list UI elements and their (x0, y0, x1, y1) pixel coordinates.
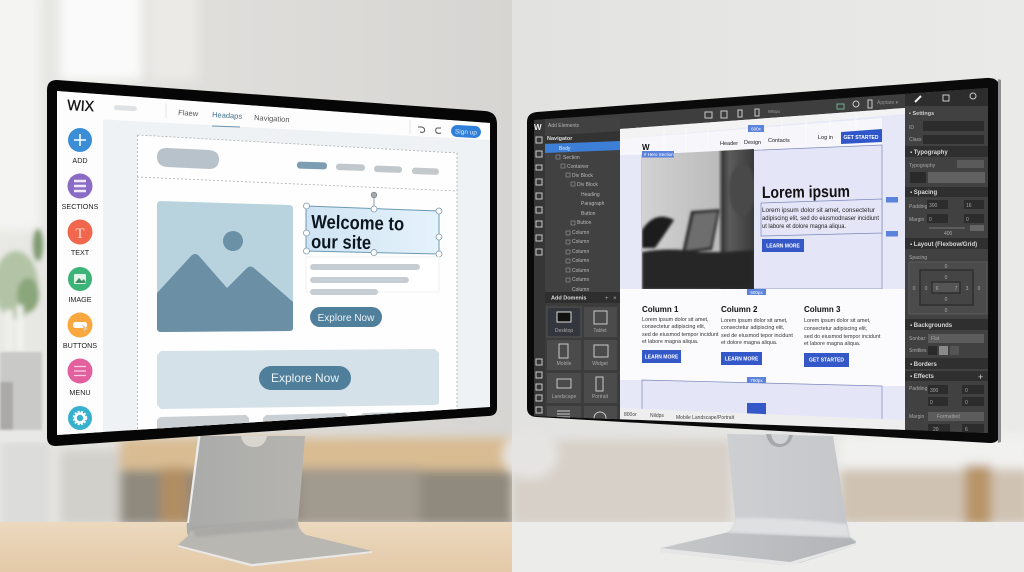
hero frame (642, 145, 882, 289)
image placeholder (157, 201, 293, 332)
column 3: Lorem ipsum dolor sit amet, (804, 318, 871, 324)
navigator panel (545, 118, 620, 293)
top toolbar (57, 91, 490, 140)
tool: text: T (75, 226, 85, 242)
left monitor stand (178, 436, 372, 566)
spacing: 0 (929, 217, 932, 223)
tree rows: Column (572, 268, 589, 274)
plant (0, 229, 43, 352)
sidebar (57, 116, 103, 441)
banner: Explore Now (271, 371, 339, 385)
lower section (642, 377, 882, 420)
table tops (0, 522, 1024, 572)
layout (905, 238, 988, 314)
button: explore now small: Explore Now (318, 313, 375, 324)
page canvas (137, 135, 457, 440)
status bar tabs: Nildps (650, 413, 664, 419)
screen: website editor (50, 85, 495, 441)
left icon rail: W (534, 123, 542, 132)
paragraph placeholder (306, 257, 439, 295)
grid columns (664, 118, 856, 136)
top toolbar: Apptate ▾ (877, 100, 899, 106)
tool: menu: MENU (69, 388, 91, 397)
logo: WIX (67, 97, 95, 115)
icon: undo (418, 127, 425, 132)
column 2: sed de eiusmod tepor incidunt (721, 333, 793, 339)
box model: 7 (955, 286, 958, 292)
backgrounds: Sonbar: (909, 336, 927, 342)
tree rows: Column (572, 258, 589, 264)
column 2: et dolore magna aliqua. (721, 340, 777, 346)
column 2: Lorem ipsum dolor sit amet, (721, 318, 788, 324)
tree rows: Paragraph (581, 201, 605, 207)
panel tabs (915, 93, 976, 102)
columns section (620, 289, 905, 386)
borders (905, 358, 988, 369)
hero button (762, 239, 804, 252)
selected heading: Welcome to (311, 212, 404, 235)
tree rows: Section (563, 155, 580, 161)
tree rows: Container (567, 164, 589, 170)
selected heading: our site (311, 232, 371, 254)
column 3: et labore magna aliqua. (804, 341, 860, 347)
column 3: GET STARTED (809, 358, 844, 364)
hero paragraph (761, 199, 882, 236)
navigator panel: Navigator (547, 136, 573, 142)
column 1: LEARN MORE (645, 354, 679, 360)
settings: ▪ Settings (909, 111, 934, 117)
tab: Flaew (178, 108, 199, 118)
nav placeholders (297, 161, 439, 175)
selected body row (545, 141, 620, 153)
effects: 0 (965, 388, 968, 394)
top toolbar (705, 100, 899, 118)
background room: left half (0, 0, 520, 572)
right monitor (527, 78, 1001, 445)
spacing badges (886, 197, 898, 236)
tool: add (68, 128, 92, 165)
selected heading (304, 192, 442, 257)
box model: 0 (945, 275, 948, 281)
tool: buttons (63, 312, 97, 350)
tile: desktop: Desktop (555, 328, 573, 334)
spacing: 0 (966, 217, 969, 223)
banner (157, 349, 439, 409)
backgrounds: Smitlies (909, 348, 927, 354)
box model: 0 (945, 297, 948, 303)
tile: landscape: Landscape (552, 394, 576, 400)
typography: Typography (909, 163, 936, 169)
add elements panel (545, 292, 620, 424)
box model: 0 (913, 286, 916, 292)
tool: buttons: BUTTONS (63, 341, 97, 350)
column 1: Lorem ipsum dolor sit amet, (642, 317, 709, 323)
box model (909, 262, 987, 314)
icon: redo (436, 128, 441, 133)
width badge (748, 125, 764, 132)
tool: menu (68, 358, 92, 397)
tool: add: ADD (72, 156, 88, 165)
tree rows: Column (572, 239, 589, 245)
effects: 6 (965, 427, 968, 433)
plant pot (0, 352, 48, 442)
hero section badge: # Hero Section (644, 152, 674, 157)
button: explore now small (310, 307, 382, 327)
column 3 (804, 305, 881, 367)
spacing: 16 (966, 203, 972, 209)
box model: 0 (945, 264, 948, 270)
typography (905, 146, 988, 183)
effects: 300 (930, 388, 939, 394)
navigator panel: Add Elements (548, 123, 580, 129)
tab: Navigation (254, 113, 290, 124)
spacing: 300 (929, 203, 938, 209)
layout: Spacing (909, 255, 927, 261)
spacing (905, 187, 988, 237)
add elements panel: Add Domenis (551, 296, 586, 302)
add elements panel: × (613, 296, 617, 302)
borders: ▪ Borders (910, 362, 937, 368)
header nav: Contacts (768, 138, 790, 144)
monitor bezel right (527, 78, 1000, 443)
logo placeholder (157, 148, 219, 169)
column 3: Column 3 (804, 305, 841, 314)
layout: ▪ Layout (Flexbow/Grid) (910, 242, 977, 248)
backgrounds (905, 319, 988, 355)
status bar tabs: 800or (624, 412, 637, 418)
header nav: W (642, 143, 650, 152)
tool: image: IMAGE (68, 295, 92, 304)
column 3: sed do eiusmod tempor incidunt (804, 334, 881, 340)
column 1: et labore magna aliqua. (642, 339, 698, 345)
monitor bezel left (47, 80, 497, 446)
width badge: 600x (751, 126, 762, 132)
tree rows: Heading (581, 192, 600, 198)
top toolbar: 980px (768, 109, 781, 114)
tree rows: Column (572, 277, 589, 283)
tree rows: Column (572, 230, 589, 236)
effects: Margin (909, 414, 925, 420)
background room: right half (502, 0, 1024, 572)
hero paragraph: adipiscing elit, sed do eiusmodnaser incidiunt (762, 215, 879, 222)
typography: ▪ Typography (910, 150, 948, 156)
screen: dark editor (530, 85, 995, 445)
effects: Padding (909, 386, 928, 392)
box model: 6 (936, 286, 939, 292)
hero button: LEARN MORE (766, 244, 800, 250)
columns section: 600px (750, 290, 763, 295)
tree rows: Div Block (577, 182, 598, 188)
column 2: consectetur adipiscing elit, (721, 325, 785, 331)
column 2 (721, 305, 793, 365)
tree rows: Button (577, 220, 592, 226)
spacing: ▪ Spacing (910, 190, 937, 196)
tool: image (68, 267, 92, 304)
left icon rail (534, 118, 545, 418)
effects: 20 (933, 427, 939, 433)
effects (905, 371, 988, 433)
tree rows: Button (581, 211, 596, 217)
header nav: Design (744, 140, 761, 146)
column 2: Column 2 (721, 305, 758, 314)
navigator panel: Body (559, 146, 571, 152)
hero paragraph: Lorem ipsum dolor sit amet, consectetur (762, 207, 876, 214)
settings: ID (909, 125, 914, 131)
column 3: consectetur adipiscing elit, (804, 326, 868, 332)
column 2: LEARN MORE (725, 356, 759, 362)
box model: 3 (966, 286, 969, 292)
sign up button: Sign up (455, 128, 477, 137)
header nav (642, 129, 882, 152)
card placeholders (157, 411, 427, 429)
backgrounds: Flat (931, 336, 940, 342)
effects: 0 (965, 400, 968, 406)
spacing: 400 (944, 231, 953, 237)
hero paragraph: ut labore et dolore magna aliqua. (762, 223, 846, 230)
tree rows: Column (572, 249, 589, 255)
toolbar icons (837, 100, 872, 109)
settings (909, 111, 984, 144)
tile: widget: Widget (592, 361, 608, 367)
tree rows: Div Block (572, 173, 593, 179)
effects: 0 (930, 400, 933, 406)
backgrounds: ▪ Backgrounds (910, 323, 953, 329)
tree rows: Column (572, 287, 589, 293)
box model: 0 (978, 286, 981, 292)
sign up button (451, 125, 481, 138)
right monitor stand (660, 434, 856, 565)
column 1: sed de eiusmod tempor incidunt (642, 332, 719, 338)
header nav: Header (720, 141, 738, 147)
box model: 0 (925, 286, 928, 292)
column 1: Column 1 (642, 305, 679, 314)
spacing: Margin (909, 217, 925, 223)
tree rows (563, 155, 605, 293)
tile: mobile: Mobile (557, 361, 572, 367)
tool: settings (68, 406, 92, 430)
effects: ▪ Effects (910, 374, 934, 380)
tile: portrait: Portrait (592, 394, 609, 400)
canvas (620, 108, 905, 432)
tool: text (68, 220, 92, 257)
column 1: consectetur adipiscing elit, (642, 324, 706, 330)
box model: 0 (945, 308, 948, 314)
hero heading: Lorem ipsum (762, 183, 850, 202)
tool: sections (62, 174, 99, 211)
header nav: GET STARTED (844, 135, 879, 141)
lower section: 760px (750, 378, 763, 383)
tool: text: TEXT (71, 248, 90, 257)
tile: tablet: Tablet (593, 328, 607, 334)
status bar tabs (620, 408, 905, 432)
right properties panel (905, 85, 990, 435)
hero photo (642, 148, 755, 290)
status bar tabs: Mobile Landscape/Portrait (676, 415, 735, 421)
viewport icons (705, 109, 759, 118)
settings: Class (909, 137, 922, 143)
effects: + (978, 372, 983, 382)
left monitor (47, 80, 497, 446)
column 1 (642, 305, 719, 363)
tool: sections: SECTIONS (62, 202, 99, 211)
effects: Formatted (937, 414, 960, 420)
add elements panel: + (605, 296, 609, 302)
spacing: Padding (909, 204, 928, 210)
tab active: Headaps (212, 110, 243, 121)
tile: row four (547, 406, 617, 424)
header nav: Log in (818, 135, 833, 141)
